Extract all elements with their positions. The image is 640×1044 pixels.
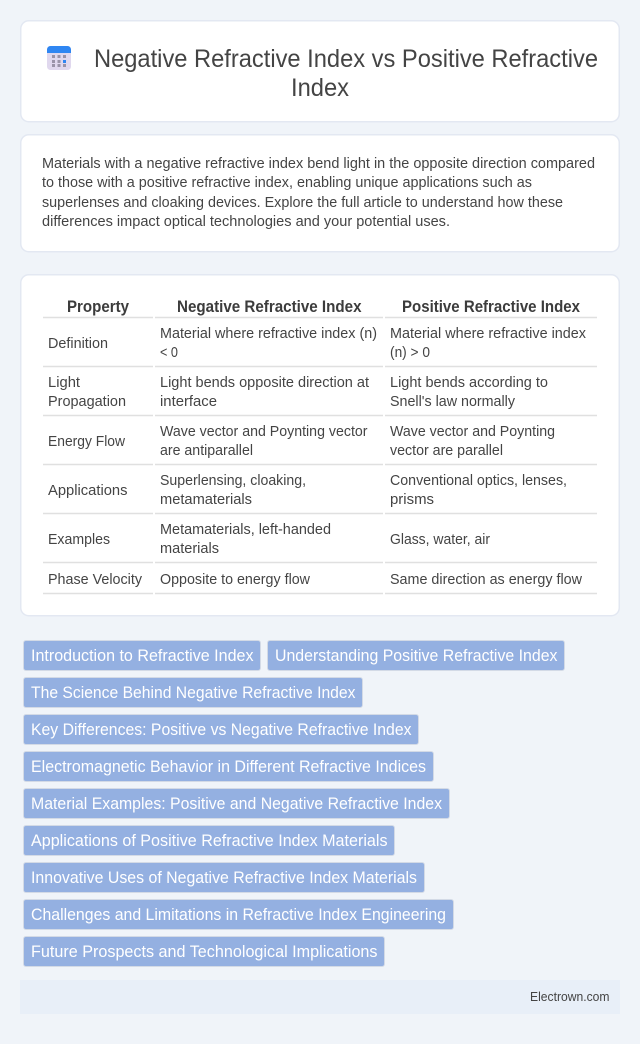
tag: introduction xyxy=(24,640,260,670)
row: light propagation: interface xyxy=(160,393,217,410)
intro paragraph xyxy=(42,155,595,230)
row: applications: Conventional optics, lenses, xyxy=(390,472,567,489)
tag: innovative uses xyxy=(24,862,424,892)
row: applications: Applications xyxy=(48,482,128,499)
tag: science: The Science Behind Negative Refractive Index xyxy=(31,684,356,702)
row: energy flow: are antiparallel xyxy=(160,442,253,459)
row: light propagation: Snell's law normally xyxy=(390,393,515,410)
title xyxy=(94,45,598,102)
row: light propagation: Light bends opposite direction at xyxy=(160,374,370,391)
intro paragraph: to those with a positive refractive index, enabling unique applications such as xyxy=(42,174,532,191)
row: light propagation: Propagation xyxy=(48,393,126,410)
row: examples xyxy=(48,521,490,557)
panel: title header xyxy=(21,21,619,122)
panel: topic tags xyxy=(24,640,564,966)
row: light propagation xyxy=(48,374,548,410)
tag: material examples xyxy=(24,788,450,818)
footer xyxy=(20,980,620,1014)
row: applications xyxy=(48,472,567,508)
row: examples: Examples xyxy=(48,531,110,548)
tag: key differences xyxy=(24,714,418,744)
row: phase velocity: Opposite to energy flow xyxy=(160,571,310,588)
row: phase velocity: Phase Velocity xyxy=(48,571,142,588)
icon: calendar xyxy=(47,46,71,70)
tag: future prospects xyxy=(24,936,384,966)
row: energy flow: Wave vector and Poynting vector xyxy=(160,423,368,440)
row: energy flow: vector are parallel xyxy=(390,442,503,459)
row: definition: Definition xyxy=(48,335,108,352)
row: energy flow xyxy=(48,423,555,459)
row: examples: Metamaterials, left-handed xyxy=(160,521,331,538)
tag: science xyxy=(24,678,362,708)
row: examples: Glass, water, air xyxy=(390,531,490,548)
row: energy flow: Energy Flow xyxy=(48,433,125,450)
panel: comparison table xyxy=(21,275,619,616)
tag: electromagnetic xyxy=(24,752,434,782)
tag: electromagnetic: Electromagnetic Behavior in Different Refractive Indices xyxy=(31,758,426,776)
row: definition xyxy=(48,325,586,361)
row: phase velocity xyxy=(48,571,582,588)
tag: innovative uses: Innovative Uses of Negative Refractive Index Materials xyxy=(31,869,417,887)
intro paragraph: differences impact optical technologies and your potential uses. xyxy=(42,213,450,230)
row: phase velocity: Same direction as energy flow xyxy=(390,571,582,588)
row: definition: (n) > 0 xyxy=(390,344,430,361)
row: applications: metamaterials xyxy=(160,491,252,508)
footer: Electrown.com xyxy=(530,990,610,1004)
row: light propagation: Light bends according to xyxy=(390,374,548,391)
row: definition: Material where refractive index (n) xyxy=(160,325,377,342)
row: light propagation: Light xyxy=(48,374,81,391)
tag: applications xyxy=(24,826,394,856)
table header: Negative Refractive Index xyxy=(177,298,362,316)
tag: key differences: Key Differences: Positive vs Negative Refractive Index xyxy=(31,721,412,739)
row: examples: materials xyxy=(160,540,219,557)
intro paragraph: superlenses and cloaking devices. Explore the full article to understand how these xyxy=(42,194,563,211)
row: applications: prisms xyxy=(390,491,434,508)
table header: Positive Refractive Index xyxy=(402,298,581,316)
table header: Property xyxy=(67,298,130,316)
tag: challenges xyxy=(24,900,454,930)
row: applications: Superlensing, cloaking, xyxy=(160,472,306,489)
title: Index xyxy=(291,74,349,102)
tag: positive index: Understanding Positive Refractive Index xyxy=(275,647,558,665)
tag: applications: Applications of Positive Refractive Index Materials xyxy=(31,832,388,850)
tag: future prospects: Future Prospects and Technological Implications xyxy=(31,943,378,961)
tag: challenges: Challenges and Limitations in Refractive Index Engineering xyxy=(31,906,446,924)
intro paragraph: Materials with a negative refractive index bend light in the opposite direction compared xyxy=(42,155,595,172)
tag: positive index xyxy=(268,640,564,670)
row: definition: < 0 xyxy=(160,344,178,361)
row: definition: Material where refractive index xyxy=(390,325,586,342)
panel: intro text xyxy=(21,135,619,252)
title: Negative Refractive Index vs Positive Refractive xyxy=(94,45,598,73)
table header xyxy=(67,298,581,316)
row: energy flow: Wave vector and Poynting xyxy=(390,423,555,440)
tag: material examples: Material Examples: Positive and Negative Refractive Index xyxy=(31,795,443,813)
tag: introduction: Introduction to Refractive Index xyxy=(31,647,254,665)
